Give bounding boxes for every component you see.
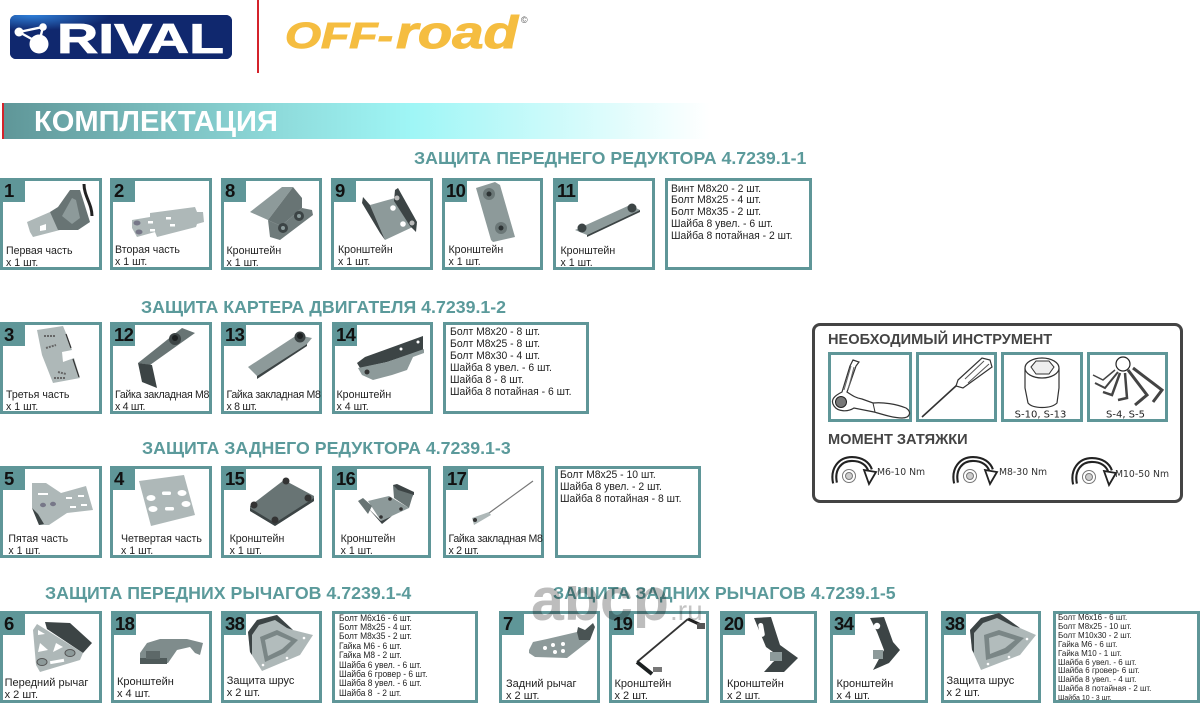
part 8: х 1 шт. (226, 257, 259, 269)
part 18: х 4 шт. (117, 688, 150, 700)
list: fasteners 5: Шайба 8 увел. - 4 шт. (1058, 674, 1136, 684)
part 10 (442, 178, 543, 270)
list: fasteners 5: Шайба 10 - 3 шт. (1058, 693, 1111, 702)
part 16: х 1 шт. (341, 545, 373, 557)
part 14: х 4 шт. (336, 401, 369, 413)
list: fasteners 1 (665, 178, 812, 270)
part 12: х 4 шт. (115, 401, 145, 413)
torque: M10-50 (1071, 457, 1169, 487)
part 9 (331, 178, 433, 270)
part 19: х 2 шт. (614, 690, 648, 702)
banner: title (2, 103, 710, 139)
heading: front reducer: ЗАЩИТА ПЕРЕДНЕГО РЕДУКТОРА 4.7239.1-1 (414, 148, 806, 168)
part 1: 1 (4, 180, 14, 201)
list: fasteners 3: Шайба 8 увел. - 2 шт. (560, 481, 662, 493)
list: fasteners 4: Гайка М6 - 6 шт. (339, 641, 402, 651)
part 20: х 2 шт. (727, 690, 760, 702)
part 34: 34 (834, 613, 853, 634)
part 13: 13 (225, 324, 244, 345)
part 8: 8 (225, 180, 235, 201)
part 15: Кронштейн (230, 533, 284, 545)
watermark: abcp.ru: .ru (670, 595, 703, 626)
part 34 (830, 611, 928, 703)
part 16: 16 (336, 468, 355, 489)
part 9: Кронштейн (338, 244, 393, 256)
list: fasteners 1: Винт М8х20 - 2 шт. (671, 182, 761, 194)
list: fasteners 4: Болт М8х25 - 4 шт. (339, 622, 412, 632)
tool: socket (1001, 352, 1083, 422)
part 19: Кронштейн (614, 678, 671, 690)
heading: rear arms: ЗАЩИТА ЗАДНИХ РЫЧАГОВ 4.7239.1-5 (553, 583, 896, 603)
list: fasteners 5: Болт М6х16 - 6 шт. (1058, 612, 1127, 622)
part 1: Первая часть (6, 245, 73, 257)
part 3: Третья часть (6, 389, 69, 401)
heading: front arms: ЗАЩИТА ПЕРЕДНИХ РЫЧАГОВ 4.7239.1-4 (45, 583, 411, 603)
part 11 (553, 178, 655, 270)
part 17: х 2 шт. (448, 545, 479, 557)
torque: M6-10 (831, 456, 925, 486)
list: fasteners 4 (332, 611, 478, 703)
part 15: 15 (225, 468, 244, 489)
list: fasteners 4: Гайка М8 - 2 шт. (339, 650, 402, 660)
part 38 front: Защита шрус (227, 675, 294, 687)
part 4: Четвертая часть (121, 533, 202, 545)
list: fasteners 5: Гайка М6 - 6 шт. (1058, 639, 1117, 649)
part 6: 6 (4, 613, 14, 634)
part 2: 2 (114, 180, 124, 201)
tool: hex keys: S-4, S-5 (1106, 410, 1145, 420)
part 18: 18 (115, 613, 134, 634)
tool: hex keys (1087, 352, 1168, 422)
part 34: Кронштейн (836, 678, 893, 690)
part 16 (332, 466, 431, 558)
part 4 (110, 466, 212, 558)
list: fasteners 5: Шайба 8 потайная - 2 шт. (1058, 683, 1151, 693)
part 2 (110, 178, 212, 270)
part 38 front: 38 (225, 613, 244, 634)
part 2: Вторая часть (115, 244, 180, 256)
part 34: х 4 шт. (836, 690, 870, 702)
list: fasteners 2: Болт М8х20 - 8 шт. (450, 326, 540, 338)
part 13: х 8 шт. (226, 401, 257, 413)
part 1 (0, 178, 102, 270)
part 38 rear (941, 611, 1041, 703)
torque: M10-50: M10-50 Nm (1115, 469, 1169, 480)
list: fasteners 5: Болт М10х30 - 2 шт. (1058, 630, 1131, 640)
part 8 (221, 178, 322, 270)
part 13: Гайка закладная М8 (226, 389, 321, 401)
list: fasteners 4: Болт М6х16 - 6 шт. (339, 612, 412, 622)
part 7: х 2 шт. (506, 690, 539, 702)
part 10: Кронштейн (448, 244, 503, 256)
list: fasteners 4: Шайба 6 увел. - 6 шт. (339, 660, 421, 670)
list: fasteners 3: Болт М8х25 - 10 шт. (560, 469, 656, 481)
part 20: Кронштейн (727, 678, 784, 690)
part 2: х 1 шт. (115, 256, 147, 268)
part 18 (111, 611, 212, 703)
list: fasteners 1: Болт М8х35 - 2 шт. (671, 206, 761, 218)
part 15: х 1 шт. (230, 545, 262, 557)
torque: M8-30 (952, 456, 1047, 486)
list: fasteners 4: Шайба 6 гровер - 6 шт. (339, 669, 427, 679)
tool: socket: S-10, S-13 (1015, 410, 1066, 420)
tool: screwdriver (916, 352, 997, 422)
panel: tools and torque (812, 323, 1183, 503)
part 9: 9 (335, 180, 345, 201)
heading: rear reducer: ЗАЩИТА ЗАДНЕГО РЕДУКТОРА 4.7239.1-3 (142, 438, 511, 458)
list: fasteners 1: Болт М8х25 - 4 шт. (671, 194, 761, 206)
part 16: Кронштейн (341, 533, 395, 545)
part 11: х 1 шт. (560, 257, 593, 269)
part 5: Пятая часть (8, 533, 68, 545)
part 3: х 1 шт. (6, 401, 38, 413)
part 38 rear: Защита шрус (946, 675, 1014, 687)
list: fasteners 1: Шайба 8 потайная - 2 шт. (671, 230, 792, 242)
part 19 (609, 611, 709, 703)
part 14 (332, 322, 433, 414)
part 10: 10 (446, 180, 465, 201)
logo: RIVAL (10, 15, 232, 60)
tool: ratchet (828, 352, 912, 422)
part 12: 12 (114, 324, 133, 345)
part 7: 7 (503, 613, 513, 634)
logo: off-road: © (521, 15, 528, 25)
red divider (257, 0, 259, 73)
part 7 (499, 611, 600, 703)
logo: off-road (285, 8, 528, 54)
list: fasteners 5: Шайба 6 гровер- 6 шт. (1058, 665, 1139, 675)
part 4: х 1 шт. (121, 545, 153, 557)
part 38 rear: х 2 шт. (946, 687, 980, 699)
list: fasteners 5 (1053, 611, 1200, 703)
part 15 (221, 466, 322, 558)
part 14: Кронштейн (336, 389, 391, 401)
part 10: х 1 шт. (448, 256, 481, 268)
list: fasteners 5: Гайка М10 - 1 шт. (1058, 648, 1121, 658)
part 5: 5 (4, 468, 14, 489)
part 4: 4 (114, 468, 124, 489)
part 18: Кронштейн (117, 676, 174, 688)
list: fasteners 3 (555, 466, 701, 558)
part 13 (221, 322, 322, 414)
part 17 (443, 466, 544, 558)
list: fasteners 2 (443, 322, 589, 414)
part 5: х 1 шт. (8, 545, 41, 557)
part 8: Кронштейн (226, 245, 281, 257)
list: fasteners 5: Болт М8х25 - 10 шт. (1058, 621, 1131, 631)
heading: tools: НЕОБХОДИМЫЙ ИНСТРУМЕНТ (828, 332, 1052, 348)
part 38 front: х 2 шт. (227, 687, 260, 699)
part 3: 3 (4, 324, 14, 345)
list: fasteners 2: Болт М8х30 - 4 шт. (450, 350, 540, 362)
part 6: х 2 шт. (5, 689, 38, 701)
list: fasteners 2: Шайба 8 - 8 шт. (450, 374, 524, 386)
part 12 (110, 322, 212, 414)
heading: torque: МОМЕНТ ЗАТЯЖКИ (828, 432, 968, 448)
list: fasteners 2: Шайба 8 увел. - 6 шт. (450, 362, 552, 374)
part 20 (720, 611, 817, 703)
list: fasteners 4: Болт М8х35 - 2 шт. (339, 631, 412, 641)
list: fasteners 5: Шайба 6 увел. - 6 шт. (1058, 657, 1136, 667)
part 3 (0, 322, 102, 414)
torque: M6-10: M6-10 Nm (877, 467, 925, 478)
part 38 rear: 38 (945, 613, 964, 634)
part 11: Кронштейн (560, 245, 615, 257)
part 7: Задний рычаг (506, 678, 576, 690)
list: fasteners 3: Шайба 8 потайная - 8 шт. (560, 493, 681, 505)
part 6 (0, 611, 102, 703)
heading: engine crankcase: ЗАЩИТА КАРТЕРА ДВИГАТЕЛЯ 4.7239.1-2 (141, 297, 506, 317)
list: fasteners 2: Шайба 8 потайная - 6 шт. (450, 386, 571, 398)
part 12: Гайка закладная М8 (115, 389, 209, 401)
part 38 front (221, 611, 322, 703)
part 1: х 1 шт. (6, 257, 38, 269)
banner: title: КОМПЛЕКТАЦИЯ (34, 106, 278, 138)
list: fasteners 4: Шайба 8 - 2 шт. (339, 688, 401, 698)
part 6: Передний рычаг (5, 677, 88, 689)
part 17: Гайка закладная М8 (448, 533, 543, 545)
part 19: 19 (613, 613, 632, 634)
part 11: 11 (557, 180, 575, 201)
list: fasteners 2: Болт М8х25 - 8 шт. (450, 338, 540, 350)
part 9: х 1 шт. (338, 256, 370, 268)
list: fasteners 4: Шайба 8 увел. - 6 шт. (339, 678, 421, 688)
part 17: 17 (447, 468, 466, 489)
torque: M8-30: M8-30 Nm (999, 467, 1047, 478)
list: fasteners 1: Шайба 8 увел. - 6 шт. (671, 218, 773, 230)
part 20: 20 (724, 613, 743, 634)
part 5 (0, 466, 102, 558)
part 14: 14 (336, 324, 355, 345)
